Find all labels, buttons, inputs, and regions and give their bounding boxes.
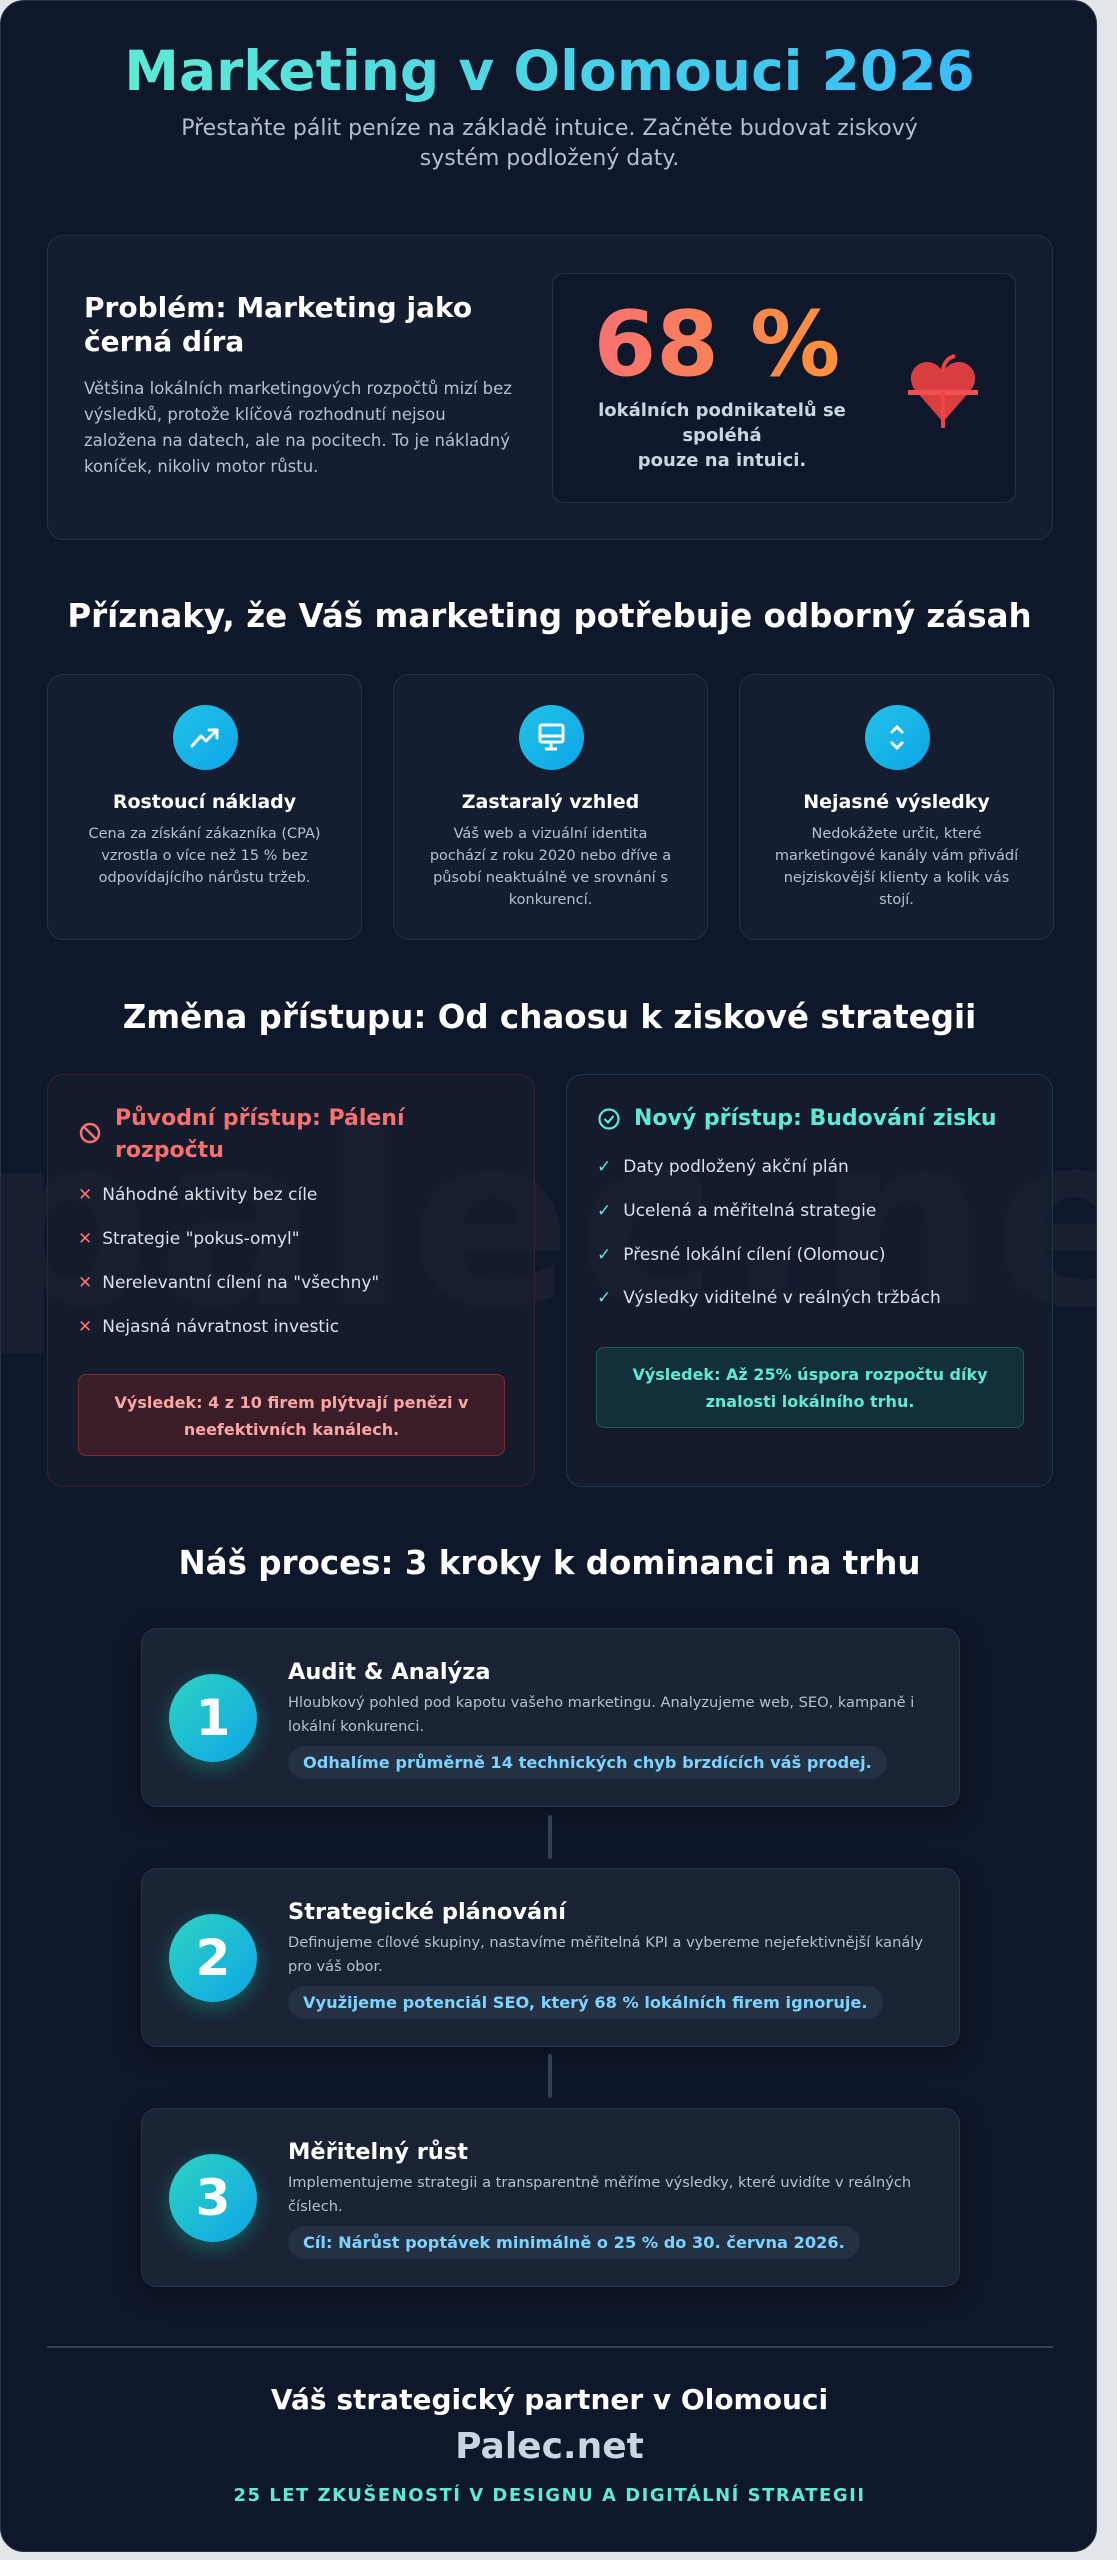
step 1: Odhalíme průměrně 14 technických chyb brzdících váš prodej. [303,1753,872,1772]
card: rising costs [47,674,362,940]
card: rising costs: Rostoucí náklady [113,791,296,813]
footer: Palec.net [455,2426,644,2467]
step 2: Strategické plánování [288,1899,566,1925]
panel: problem [47,235,1053,540]
step 3 [141,2108,960,2287]
title: Marketing v Olomouci 2026 [124,39,975,103]
panel: new approach: ✓ Ucelená a měřitelná strategie [597,1201,876,1221]
old result [78,1374,505,1456]
panel: old approach: ✕ Nejasná návratnost investic [78,1317,339,1337]
stat caption [598,400,846,471]
step 2 [141,1868,960,2047]
panel: new approach [566,1074,1053,1487]
connector [548,1815,552,1859]
panel: old approach: ✕ Strategie "pokus-omyl" [78,1229,300,1249]
card: outdated look: Váš web a vizuální identita pochází z roku 2020 nebo dříve a působí neaktuálně ve srovnání s konkurencí. [430,826,671,908]
stat box [552,273,1016,503]
new result [596,1347,1024,1428]
panel: old approach: ✕ Nerelevantní cílení na "všechny" [78,1273,379,1293]
new heading: Nový přístup: Budování zisku [634,1106,997,1131]
old result: Výsledek: 4 z 10 firem plýtvají penězi v neefektivních kanálech. [114,1393,468,1439]
step 2: 2 [196,1929,230,1987]
problem heading: Problém: Marketing jako černá díra [84,291,472,358]
icon: trend [173,705,238,770]
card: outdated look [393,674,708,940]
step 3: 3 [196,2169,230,2227]
new result: Výsledek: Až 25% úspora rozpočtu díky znalosti lokálního trhu. [632,1365,988,1411]
step 3: Cíl: Nárůst poptávek minimálně o 25 % do 30. června 2026. [303,2233,845,2252]
stat number: 68 % [594,292,840,397]
step 1 [141,1628,960,1807]
icon: heart [908,354,978,428]
card: rising costs: Cena za získání zákazníka (CPA) vzrostla o více než 15 % bez odpovídajícího nárůstu tržeb. [88,826,321,886]
panel: new approach: ✓ Daty podložený akční plán [597,1157,849,1177]
card: unclear results: Nedokážete určit, které marketingové kanály vám přivádí nejziskovější klienty a kolik vás stojí. [775,826,1018,908]
stat caption: pouze na intuici. [638,450,806,471]
step 3: Měřitelný růst [288,2139,468,2165]
card: unclear results: Nejasné výsledky [803,791,990,813]
card: outdated look: Zastaralý vzhled [462,791,639,813]
stat caption: lokálních podnikatelů se spoléhá [598,400,846,446]
step 2: Definujeme cílové skupiny, nastavíme měřitelná KPI a vybereme nejefektivnější kanály pro váš obor. [288,1934,923,1975]
step 1: 1 [196,1689,230,1747]
step 1: Hloubkový pohled pod kapotu vašeho marketingu. Analyzujeme web, SEO, kampaně i lokální konkurenci. [288,1694,914,1735]
connector [548,2054,552,2098]
problem text: Většina lokálních marketingových rozpočtů mizí bez výsledků, protože klíčová rozhodnutí nejsou založena na datech, ale na pocitech. To je nákladný koníček, nikoliv motor růstu. [84,379,512,476]
icon: monitor [519,705,584,770]
heading: process: Náš proces: 3 kroky k dominanci na trhu [178,1544,921,1582]
panel: new approach: ✓ Výsledky viditelné v reálných tržbách [597,1288,941,1308]
icon: chevrons [865,705,930,770]
subtitle: Přestaňte pálit peníze na základě intuice. Začněte budovat ziskový systém podložený daty. [181,116,918,171]
card: unclear results [739,674,1054,940]
panel: old approach: ✕ Náhodné aktivity bez cíle [78,1185,317,1205]
footer [233,2383,866,2506]
footer: Váš strategický partner v Olomouci [271,2383,828,2416]
panel: old approach [47,1074,535,1487]
heading: change: Změna přístupu: Od chaosu k ziskové strategii [123,998,976,1036]
step 1: Audit & Analýza [288,1659,491,1685]
footer: 25 LET ZKUŠENOSTÍ V DESIGNU A DIGITÁLNÍ STRATEGII [233,2485,866,2506]
old heading: Původní přístup: Pálení rozpočtu [115,1106,405,1163]
step 3: Implementujeme strategii a transparentně měříme výsledky, které uvidíte v reálných číslech. [288,2174,911,2215]
step 2: Využijeme potenciál SEO, který 68 % lokálních firem ignoruje. [303,1993,868,2012]
panel: new approach: ✓ Přesné lokální cílení (Olomouc) [597,1245,886,1265]
heading: symptoms: Příznaky, že Váš marketing potřebuje odborný zásah [67,597,1032,635]
